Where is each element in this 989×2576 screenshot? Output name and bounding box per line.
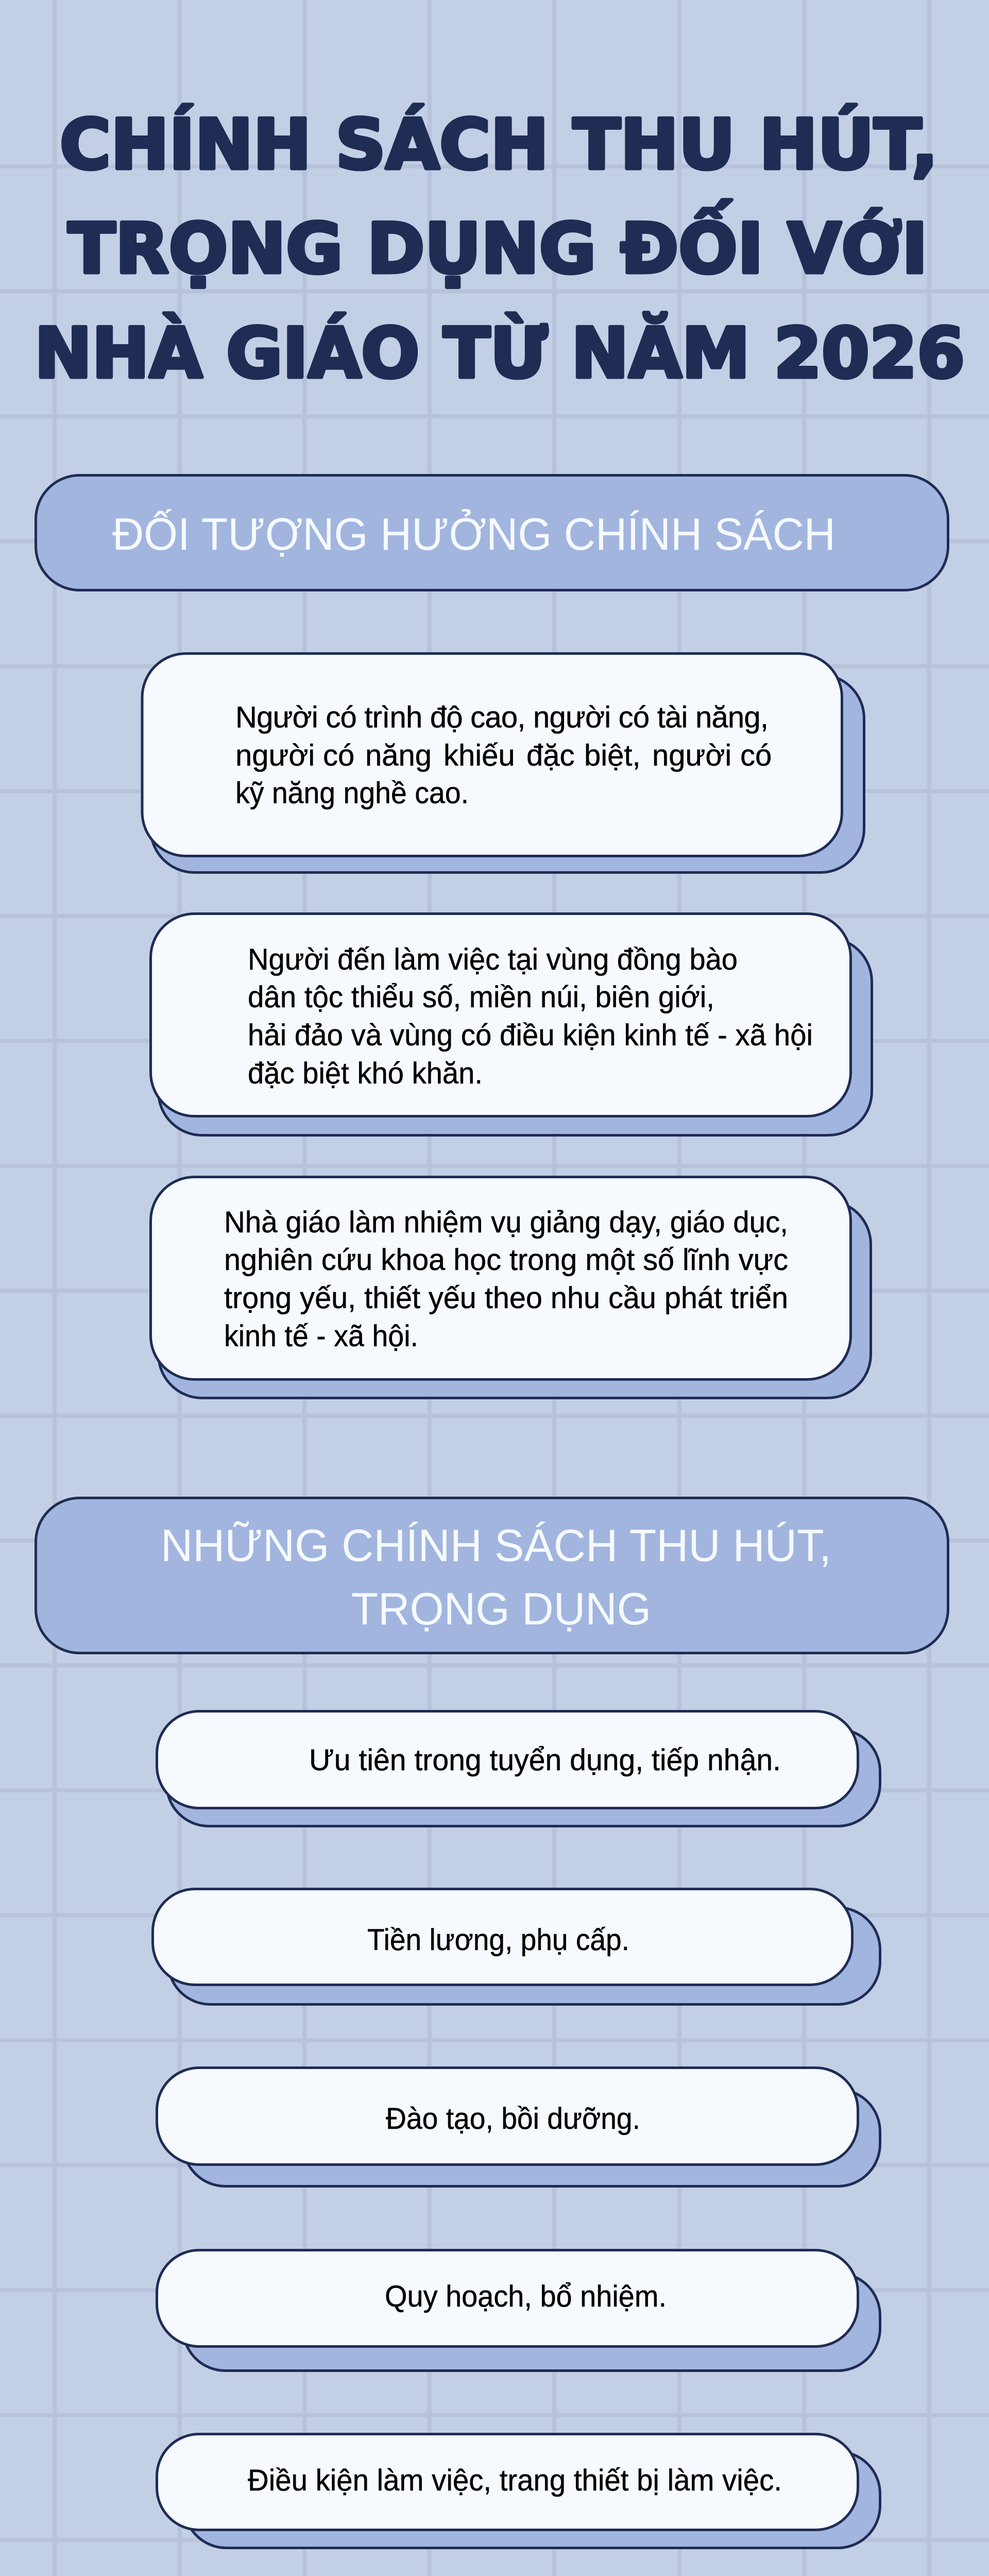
- panel: đối tượng 2: hải đảo và vùng có điều kiện kinh tế - xã hội: [248, 1019, 813, 1052]
- panel: đối tượng 1: có: [740, 739, 772, 772]
- item: điều kiện làm việc: Điều kiện làm việc, trang thiết bị làm việc.: [248, 2464, 782, 2497]
- panel: đối tượng 2: [150, 914, 872, 1136]
- item: quy hoạch: [157, 2250, 880, 2371]
- panel: đối tượng 1: người: [652, 739, 731, 772]
- panel: đối tượng 3: kinh tế - xã hội.: [224, 1319, 418, 1353]
- heading: đối tượng hưởng chính sách: ĐỐI TƯỢNG HƯỞNG CHÍNH SÁCH: [112, 509, 835, 560]
- panel: đối tượng 1: đặc: [526, 739, 575, 772]
- panel: đối tượng 2: Người đến làm việc tại vùng đồng bào: [248, 943, 738, 976]
- panel: đối tượng 1: khiếu: [444, 739, 515, 772]
- heading: những chính sách thu hút, trọng dụng: TRỌNG DỤNG: [351, 1583, 651, 1634]
- panel: đối tượng 1: người: [235, 739, 315, 772]
- item: ưu tiên tuyển dụng: Ưu tiên trong tuyển dụng, tiếp nhận.: [309, 1743, 781, 1777]
- panel: đối tượng 3: [150, 1177, 871, 1398]
- title: TRỌNG DỤNG ĐỐI VỚI: [68, 200, 928, 289]
- item: tiền lương: [152, 1889, 880, 2004]
- title: NHÀ GIÁO TỪ NĂM 2026: [35, 312, 965, 394]
- title: [35, 104, 965, 394]
- heading: những chính sách thu hút, trọng dụng: [36, 1498, 948, 1653]
- title: CHÍNH SÁCH THU HÚT,: [60, 104, 938, 185]
- item: điều kiện làm việc: [157, 2434, 880, 2548]
- panel: đối tượng 1: [142, 653, 864, 873]
- heading: những chính sách thu hút, trọng dụng: NHỮNG CHÍNH SÁCH THU HÚT,: [161, 1520, 831, 1571]
- item: tiền lương: Tiền lương, phụ cấp.: [367, 1923, 629, 1957]
- panel: đối tượng 3: trọng yếu, thiết yếu theo nhu cầu phát triển: [224, 1281, 788, 1315]
- panel: đối tượng 1: biệt,: [584, 739, 641, 772]
- heading: đối tượng hưởng chính sách: [36, 475, 948, 590]
- panel: đối tượng 3: nghiên cứu khoa học trong một số lĩnh vực: [224, 1243, 788, 1277]
- panel: đối tượng 1: Người có trình độ cao, người có tài năng,: [235, 701, 769, 734]
- panel: đối tượng 2: dân tộc thiểu số, miền núi, biên giới,: [248, 980, 714, 1014]
- item: ưu tiên tuyển dụng: [157, 1711, 880, 1826]
- panel: đối tượng 1: kỹ năng nghề cao.: [235, 776, 469, 810]
- panel: đối tượng 3: Nhà giáo làm nhiệm vụ giảng dạy, giáo dục,: [224, 1206, 788, 1239]
- item: đào tạo: [157, 2068, 880, 2187]
- item: quy hoạch: Quy hoạch, bổ nhiệm.: [385, 2280, 667, 2313]
- panel: đối tượng 1: có: [323, 739, 354, 772]
- panel: đối tượng 2: đặc biệt khó khăn.: [248, 1057, 483, 1090]
- item: đào tạo: Đào tạo, bồi dưỡng.: [386, 2102, 640, 2136]
- panel: đối tượng 1: năng: [365, 739, 432, 772]
